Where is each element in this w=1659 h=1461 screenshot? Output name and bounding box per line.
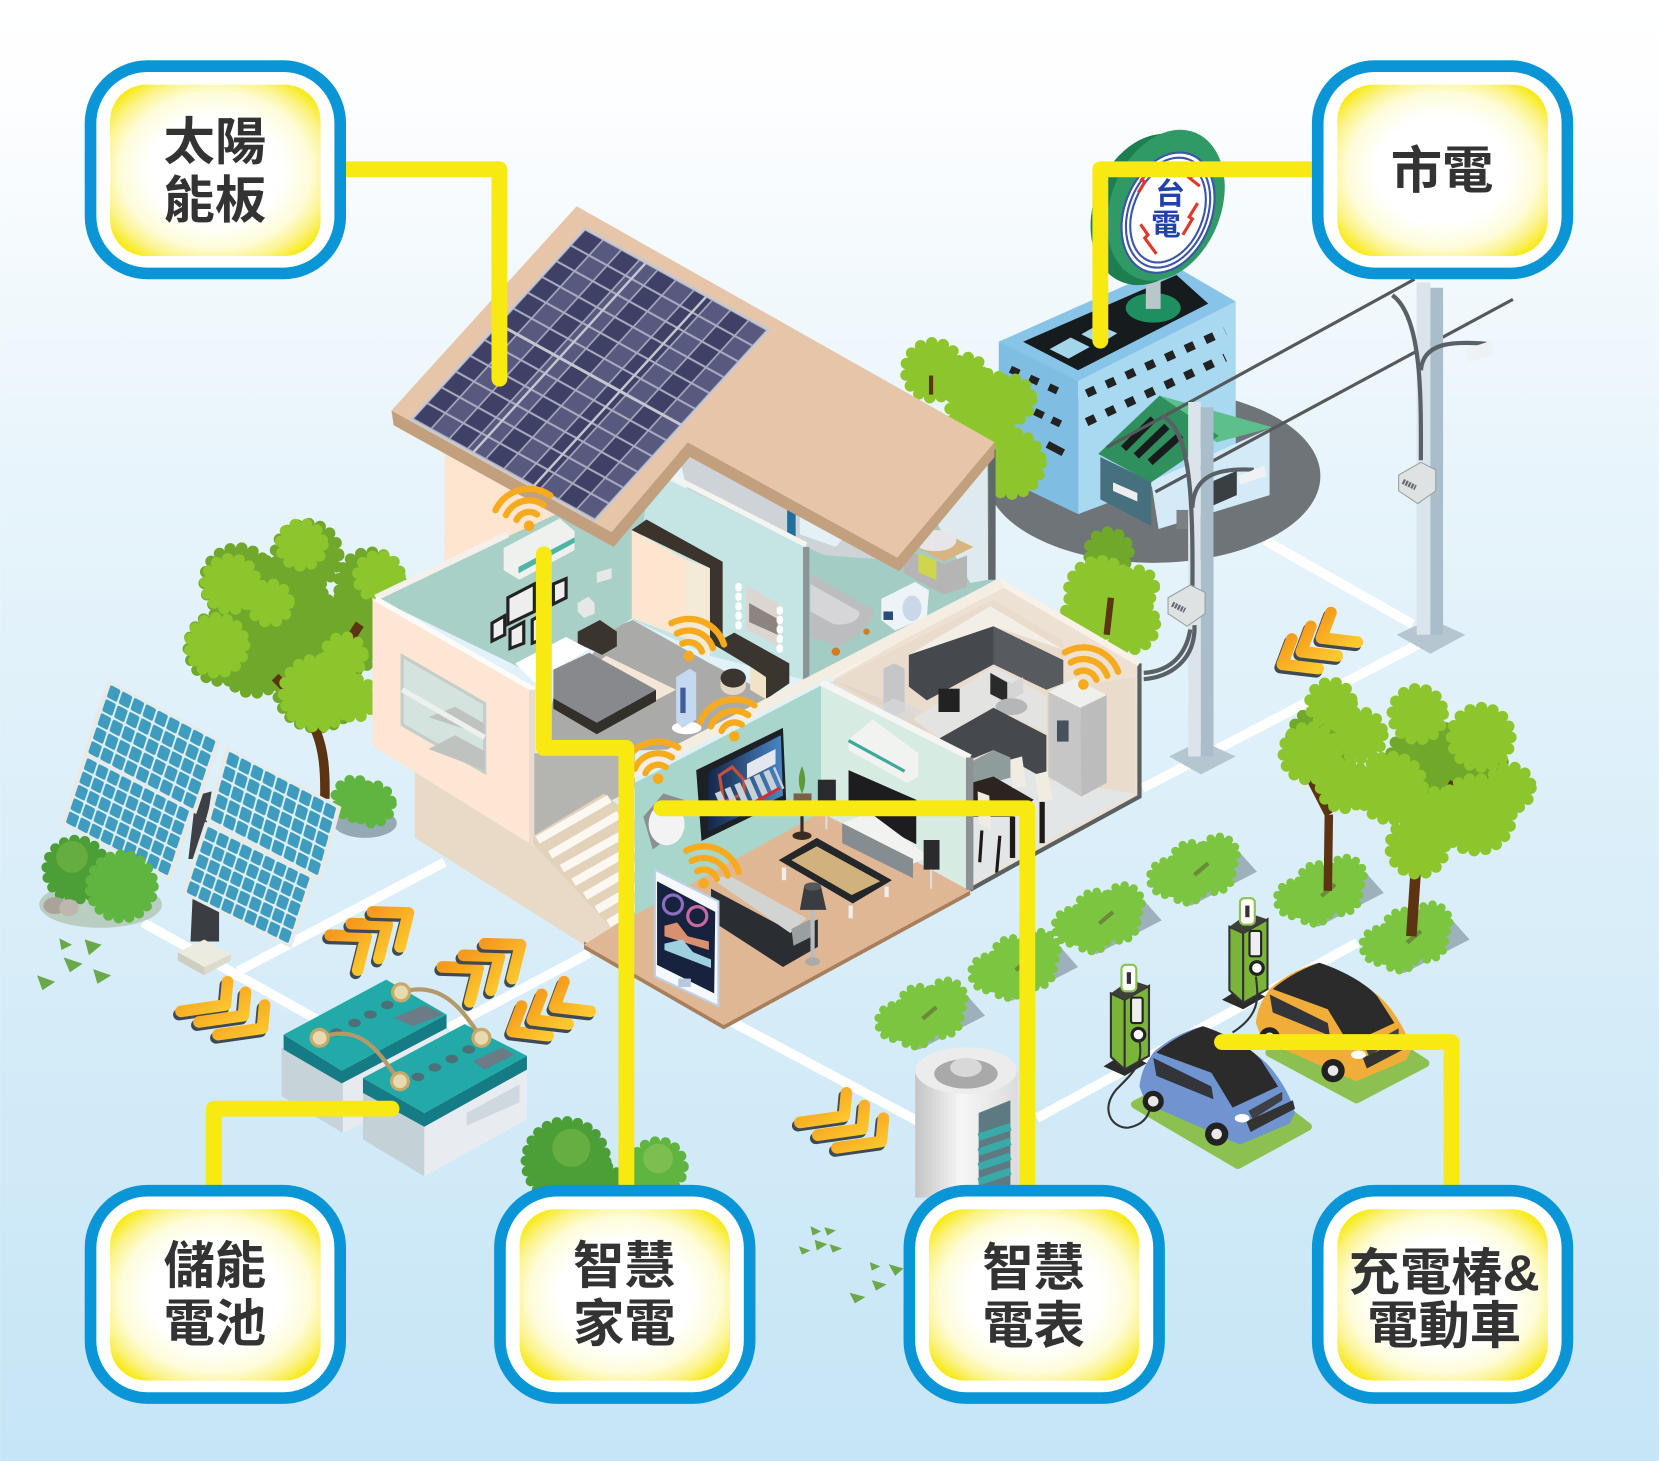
staircase — [533, 793, 656, 942]
label: smart meter: 智慧 — [982, 1239, 1085, 1296]
left tree — [188, 524, 402, 838]
label: smart appliances: 智慧 — [573, 1237, 676, 1294]
power company site: grey ground — [986, 389, 1320, 563]
speakers — [818, 780, 940, 889]
label: smart meter: 電表 — [982, 1298, 1085, 1355]
battery units — [281, 980, 527, 1176]
bathtub — [810, 573, 874, 656]
label: EV charger and car — [1318, 1191, 1567, 1398]
utility poles and wires — [1107, 279, 1513, 774]
television — [842, 770, 924, 878]
connector: city grid — [1100, 169, 1312, 341]
arrows: panels to battery upper — [328, 912, 408, 973]
label: storage battery: 電池 — [164, 1295, 266, 1352]
connector: storage battery — [214, 1109, 392, 1190]
bush and rocks near solar array — [39, 840, 162, 928]
fridge — [1048, 678, 1107, 797]
house back wall — [444, 444, 656, 592]
company logo sign — [1069, 112, 1246, 303]
arrows: to storage cylinder — [798, 1093, 883, 1151]
label: storage battery: 儲能 — [164, 1237, 266, 1294]
falling leaves bottom — [799, 1226, 904, 1303]
counter — [913, 666, 1046, 738]
ground paths — [143, 541, 1428, 1121]
arrows: grid to house — [1280, 613, 1357, 672]
company building — [999, 264, 1236, 514]
sink counter — [904, 529, 973, 595]
label: rooftop solar — [91, 66, 340, 273]
storage cylinder — [915, 1047, 1018, 1198]
bush behind label boxes — [526, 1121, 684, 1202]
kitchen shell — [831, 582, 1139, 890]
substation building — [1098, 396, 1273, 529]
falling leaves left — [37, 938, 111, 990]
rooftop solar panel — [409, 227, 771, 522]
label: city grid: 市電 — [1391, 142, 1493, 199]
label: city grid — [1318, 66, 1567, 273]
label: smart appliances — [500, 1191, 750, 1398]
arrows: panels to battery lower — [179, 982, 265, 1038]
EV charging bays — [1104, 898, 1425, 1165]
right trees and bushes — [1277, 682, 1531, 973]
tablet with dashboard — [655, 870, 718, 1006]
floor lamp — [800, 882, 826, 966]
base cabinets — [940, 708, 1046, 780]
bedroom air conditioner — [504, 518, 575, 580]
living room and kitchen — [584, 582, 1139, 1029]
tree near kitchen — [1064, 532, 1155, 650]
bed — [515, 637, 676, 734]
connector: smart meter — [661, 808, 1027, 1190]
wardrobe — [632, 519, 723, 660]
arrows: house to battery — [510, 982, 590, 1039]
floor appliance — [870, 663, 923, 730]
outdoor AC unit — [881, 582, 929, 631]
wall cabinets — [909, 606, 1063, 700]
dining table and chairs — [971, 756, 1053, 873]
roof — [392, 206, 995, 571]
wall pictures — [492, 579, 566, 649]
under-stairs wall — [534, 753, 635, 841]
label: smart meter — [909, 1191, 1159, 1398]
wifi signals — [492, 483, 1123, 899]
label: EV charger and car: 電動車 — [1367, 1298, 1521, 1355]
arrows: battery to house — [440, 944, 521, 1005]
label: rooftop solar: 太陽 — [164, 114, 266, 171]
potted plant — [792, 766, 812, 840]
vanity — [713, 585, 789, 699]
connector: smart appliances — [544, 554, 626, 1190]
company logo sign: 台 — [1155, 177, 1185, 211]
coffee table — [779, 838, 892, 918]
wall clock meter — [643, 793, 685, 850]
connector: EV charger — [1222, 1042, 1452, 1190]
living room air conditioner — [849, 719, 918, 783]
sofa — [711, 876, 818, 967]
label: rooftop solar: 能板 — [164, 172, 266, 229]
label: smart appliances: 家電 — [573, 1295, 676, 1352]
switch plate and wall box — [578, 568, 612, 618]
living room partition wall — [821, 682, 970, 890]
company logo sign: 電 — [1151, 209, 1181, 242]
connector: rooftop solar — [346, 169, 499, 379]
label: storage battery — [91, 1191, 340, 1398]
tower fan — [672, 669, 701, 734]
hedges — [878, 837, 1257, 1049]
ground solar array — [61, 680, 341, 975]
upper floor rooms — [376, 450, 996, 753]
tree beside company building — [950, 373, 1041, 494]
front peach wall with window — [372, 598, 635, 945]
label: EV charger and car: 充電椿& — [1349, 1245, 1540, 1302]
trees behind company building — [906, 343, 983, 398]
nightstand — [578, 620, 617, 655]
coffee maker and microwave — [938, 673, 1027, 715]
wall display panel — [696, 728, 786, 841]
